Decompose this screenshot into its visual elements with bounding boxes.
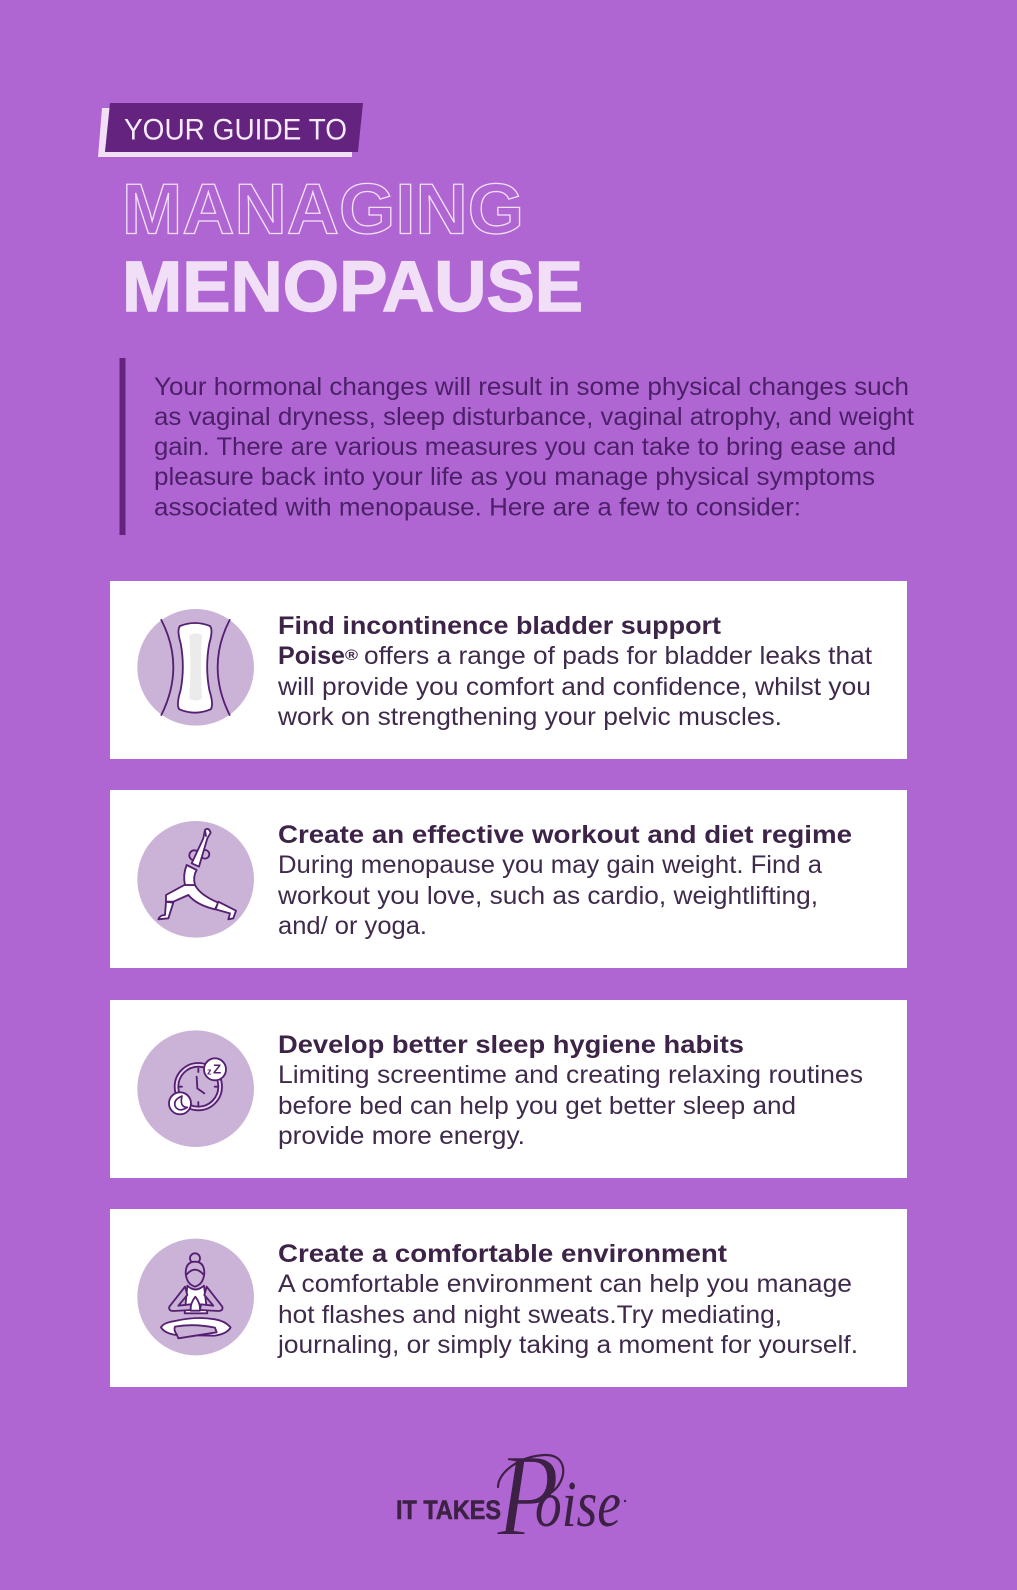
text: sleep hygiene	[278, 1031, 863, 1150]
text: bladder support: will provide you comfort and confidence, whilst you	[277, 673, 871, 701]
text: bladder support: work on strengthening your pelvic muscles.	[277, 703, 782, 731]
icon: meditating woman	[137, 1239, 254, 1355]
text: comfortable environment: hot flashes and night sweats.Try mediating,	[278, 1301, 782, 1329]
text: workout and diet: workout you love, such as cardio, weightlifting,	[277, 882, 818, 910]
intro paragraph: as vaginal dryness, sleep disturbance, vaginal atrophy, and weight	[154, 403, 914, 431]
text: workout and diet: Create an effective workout and diet regime	[278, 821, 852, 849]
text: workout and diet: During menopause you may gain weight. Find a	[278, 851, 822, 879]
text: sleep hygiene: before bed can help you get better sleep and	[278, 1092, 796, 1120]
text: bladder support: ®	[345, 647, 358, 664]
title: managing: MANAGING	[122, 170, 524, 250]
logo: it takes poise	[396, 1430, 626, 1561]
logo: it takes poise: IT TAKES	[396, 1495, 501, 1525]
intro paragraph: gain. There are various measures you can take to bring ease and	[154, 433, 896, 461]
text: bladder support: offers a range of pads for bladder leaks that	[364, 642, 872, 670]
icon: clock with moon and zz: Z	[213, 1061, 221, 1076]
text: comfortable environment: A comfortable environment can help you manage	[278, 1270, 852, 1298]
icon: clock with moon and zz: z	[207, 1066, 212, 1076]
intro paragraph: pleasure back into your life as you manage physical symptoms	[154, 463, 875, 491]
panel: bladder support	[110, 581, 907, 759]
text: bladder support: Poise	[278, 642, 345, 670]
intro paragraph: Your hormonal changes will result in some physical changes such	[154, 373, 909, 401]
panel: sleep hygiene	[110, 1000, 907, 1178]
logo: it takes poise: oise	[535, 1468, 621, 1541]
icon: clock with moon and zz	[137, 1030, 254, 1147]
heading tag: your guide to	[98, 103, 363, 157]
text: sleep hygiene: Limiting screentime and creating relaxing routines	[278, 1061, 863, 1089]
text: comfortable environment: Create a comfortable environment	[278, 1240, 728, 1268]
intro paragraph: associated with menopause. Here are a few to consider:	[154, 494, 801, 522]
icon: incontinence pad	[137, 609, 254, 726]
text: workout and diet: and/ or yoga.	[278, 912, 427, 940]
icon: yoga warrior pose	[137, 821, 254, 938]
text: sleep hygiene: provide more energy.	[278, 1122, 525, 1150]
panel: workout and diet	[110, 790, 907, 968]
text: bladder support	[277, 612, 872, 731]
text: bladder support: Find incontinence bladder support	[278, 612, 722, 640]
heading tag: your guide to: YOUR GUIDE TO	[124, 114, 347, 146]
text: comfortable environment	[277, 1240, 858, 1359]
panel: comfortable environment	[110, 1209, 907, 1387]
text: workout and diet	[277, 821, 852, 940]
intro paragraph	[120, 358, 914, 535]
text: comfortable environment: journaling, or simply taking a moment for yourself.	[277, 1331, 858, 1359]
title: menopause: MENOPAUSE	[122, 248, 583, 327]
text: sleep hygiene: Develop better sleep hygiene habits	[278, 1031, 744, 1059]
logo: it takes poise: P	[496, 1430, 559, 1561]
